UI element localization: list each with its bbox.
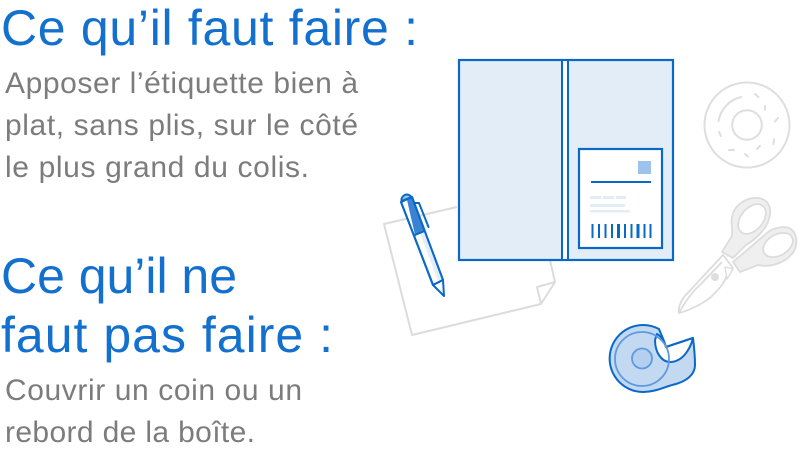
label small text lines [590, 196, 630, 212]
shipping label [579, 149, 662, 248]
icon: open box with label [459, 60, 673, 260]
icon: doughnut [704, 82, 790, 168]
icon: pen [401, 195, 444, 296]
text block: what to do [5, 67, 358, 184]
text block: what not to do: Couvrir un coin ou un [5, 374, 302, 407]
icon: sheet of paper [384, 207, 555, 335]
heading: what not to do [1, 248, 333, 363]
icon: scissors [679, 198, 797, 313]
heading: what to do: Ce qu’il faut faire : [1, 0, 418, 56]
heading: what not to do: faut pas faire : [1, 307, 333, 363]
box flaps [459, 60, 673, 260]
text block: what to do: plat, sans plis, sur le côté [5, 109, 358, 142]
heading: what not to do: Ce qu’il ne [1, 248, 237, 304]
label address line [591, 181, 651, 183]
label barcode [592, 224, 652, 238]
text block: what not to do [5, 374, 302, 449]
box centre seam [562, 60, 568, 260]
text block: what to do: Apposer l’étiquette bien à [5, 67, 358, 100]
icon: tape dispenser [610, 325, 695, 392]
text block: what not to do: rebord de la boîte. [5, 416, 255, 449]
label stamp [638, 161, 651, 174]
text block: what to do: le plus grand du colis. [5, 151, 309, 184]
